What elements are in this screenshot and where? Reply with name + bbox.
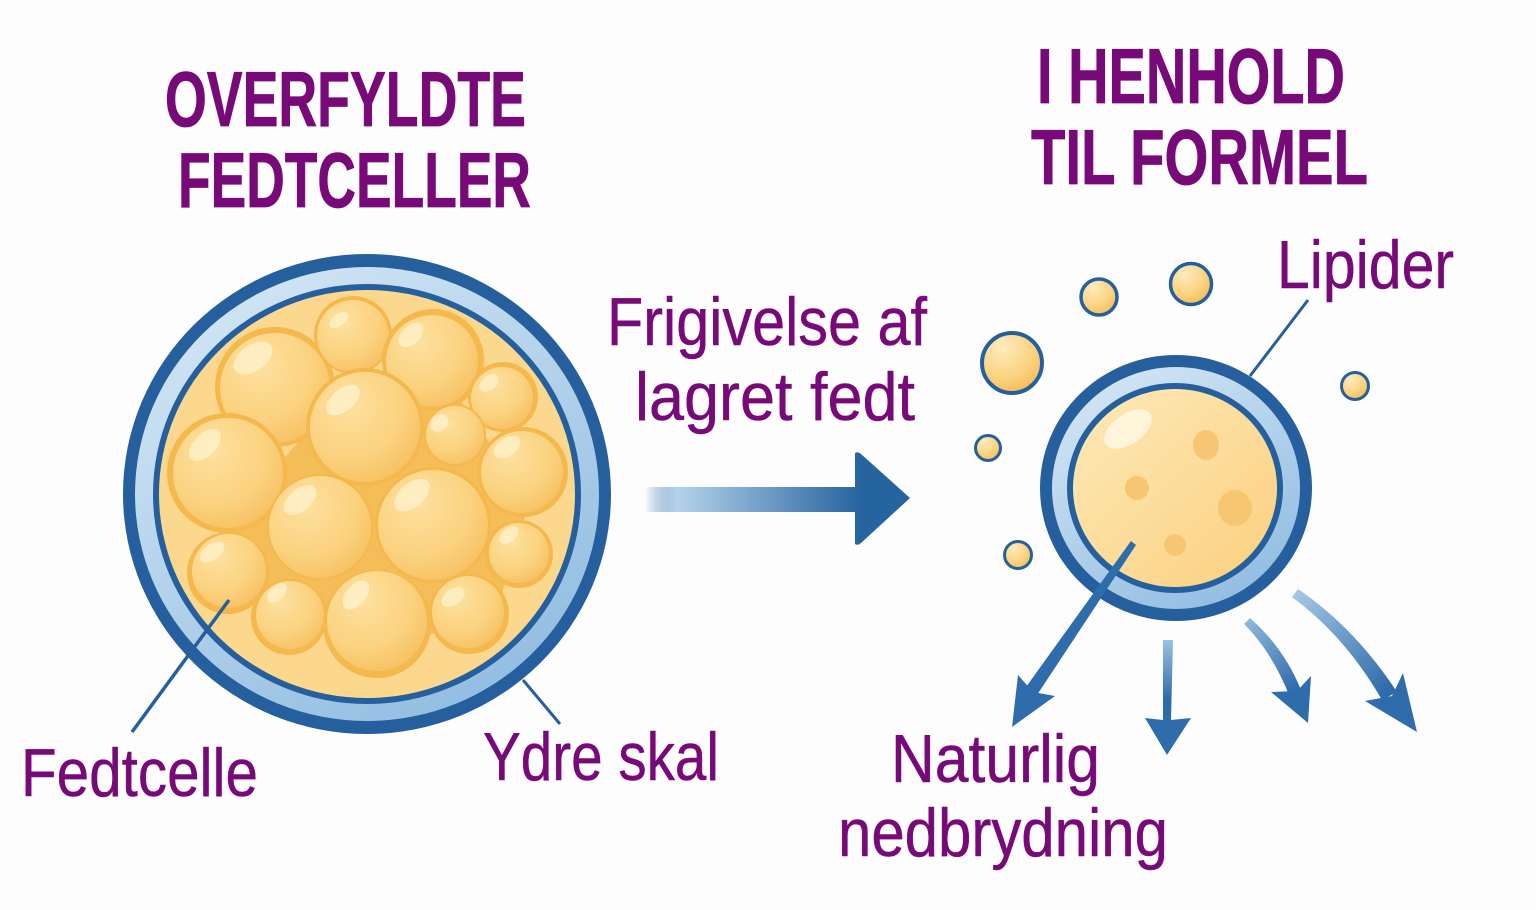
arrow: breakdown 2 bbox=[1145, 640, 1191, 755]
arrow: breakdown 3 bbox=[1244, 618, 1311, 723]
label: naturlig nedbrydning: Naturlig bbox=[891, 721, 1100, 797]
highlight bbox=[1097, 401, 1159, 457]
lipid droplets bbox=[976, 264, 1368, 568]
label: naturlig nedbrydning bbox=[838, 721, 1168, 871]
label: lipider: Lipider bbox=[1277, 227, 1454, 303]
leader line: fedtcelle bbox=[132, 600, 229, 732]
title: overfyldte fedtceller bbox=[165, 55, 531, 224]
inner membrane bbox=[1067, 383, 1283, 593]
title: i henhold til formel: I HENHOLD bbox=[1037, 32, 1345, 120]
label: frigivelse af lagret fedt: lagret fedt bbox=[635, 359, 915, 435]
outer shell bbox=[123, 254, 611, 734]
label: naturlig nedbrydning: nedbrydning bbox=[838, 795, 1168, 871]
illustration: shrunken fat cell bbox=[1040, 355, 1312, 621]
title: i henhold til formel: TIL FORMEL bbox=[1031, 113, 1368, 201]
label: frigivelse af lagret fedt bbox=[607, 284, 927, 435]
title: overfyldte fedtceller: OVERFYLDTE bbox=[165, 55, 526, 143]
arrow: breakdown 4 bbox=[1292, 589, 1417, 732]
label: frigivelse af lagret fedt: Frigivelse af bbox=[607, 284, 927, 360]
fat spots bbox=[1125, 430, 1252, 556]
illustration: overfilled fat cell bbox=[123, 254, 611, 734]
title: i henhold til formel bbox=[1031, 32, 1368, 201]
label: fedtcelle: Fedtcelle bbox=[21, 735, 258, 811]
arrow: release bbox=[645, 452, 910, 545]
leader line: ydre skal bbox=[523, 680, 560, 724]
title: overfyldte fedtceller: FEDTCELLER bbox=[178, 136, 531, 224]
inner membrane bbox=[153, 284, 581, 704]
leader line: lipider bbox=[1250, 300, 1308, 376]
arrow: breakdown 1 bbox=[1012, 541, 1136, 727]
outer shell bbox=[1040, 355, 1312, 621]
label: ydre skal: Ydre skal bbox=[483, 719, 719, 795]
fat droplets bbox=[167, 296, 568, 678]
